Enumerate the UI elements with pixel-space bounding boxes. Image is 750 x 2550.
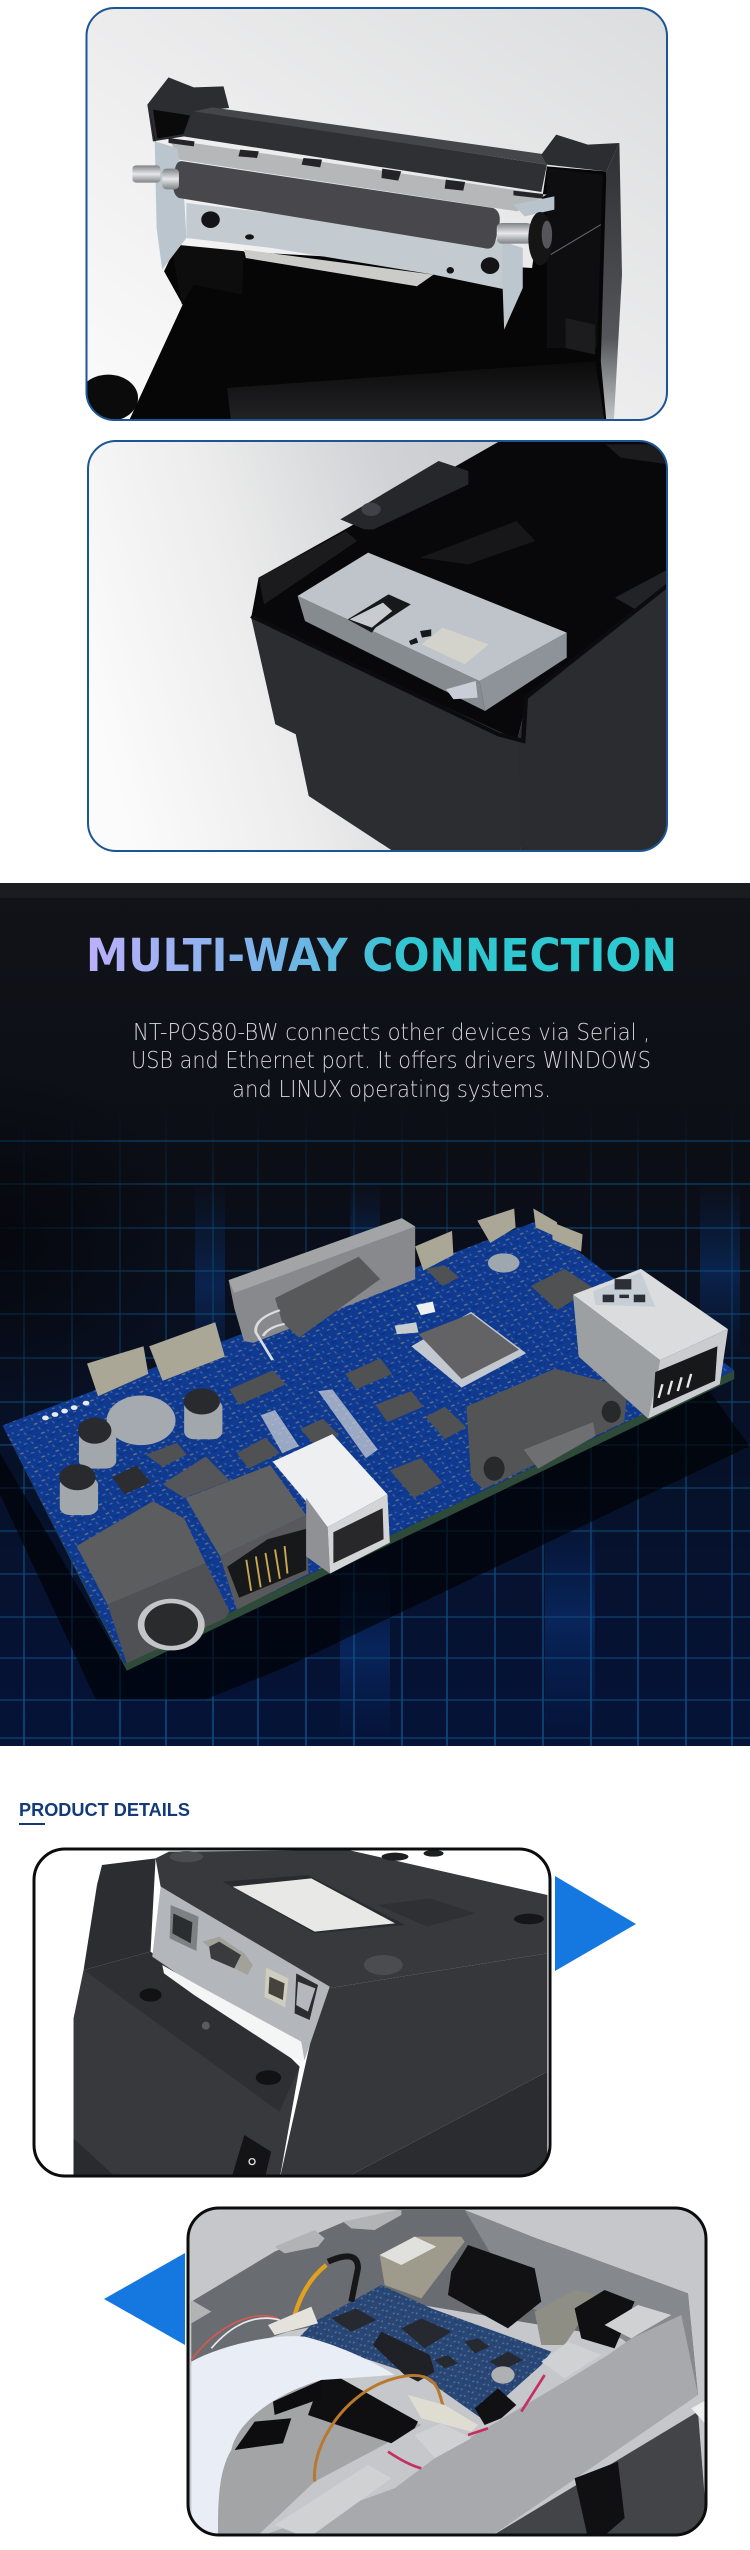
pad circles: [107, 1396, 176, 1445]
left cap: [147, 77, 229, 141]
blue glow columns: [195, 1180, 740, 1740]
interior ledges: [420, 521, 535, 564]
printer interior: [129, 166, 606, 421]
cutter blade: [244, 250, 434, 286]
ribbon wires: [446, 681, 478, 699]
mechanism side: [298, 596, 485, 711]
description text: NT-POS80-BW connects other devices via Serial ,: [133, 1020, 650, 1046]
board plug: [408, 2395, 478, 2432]
floor: [191, 2372, 421, 2538]
pcb: [2, 1221, 734, 1663]
tray floor: [228, 369, 604, 419]
usb b socket: [273, 1434, 387, 1527]
mini din socket: [77, 1501, 206, 1605]
right bracket: [502, 241, 523, 330]
white pads: [416, 1302, 435, 1315]
panel: multi-way connection section: [0, 883, 750, 1746]
striped wires: [295, 2265, 326, 2315]
metal bar: [170, 140, 547, 211]
pink wires: [388, 2375, 545, 2468]
rubber feet: [364, 1955, 403, 1975]
db9 serial socket: [466, 1369, 628, 1489]
ethernet jack: [380, 2237, 465, 2298]
buzzer: [475, 2388, 516, 2425]
panel: open printer roller photo: [79, 8, 667, 421]
main chip: [411, 1312, 526, 1388]
description text: [131, 1020, 651, 1103]
rj11 socket: [186, 1465, 306, 1556]
rear wall: [84, 1858, 156, 1970]
socket jack: [575, 2290, 635, 2348]
arrow: pointing left: [104, 2253, 185, 2345]
printer shell right: [600, 143, 622, 419]
left pillar: [149, 108, 244, 305]
black cutouts: [273, 2380, 321, 2415]
ferrite capacitor: [275, 1257, 380, 1338]
capacitor leads: [256, 1310, 285, 1360]
serial jack: [448, 2245, 541, 2328]
mounting tabs: [191, 2209, 401, 2323]
mechanism top: [298, 553, 567, 681]
arrow: pointing right: [555, 1876, 636, 1971]
top face: [156, 1850, 547, 1988]
white connector: [268, 2307, 318, 2335]
long slot: [308, 2375, 418, 2443]
left bracket: [155, 141, 186, 270]
lower dark side: [488, 2412, 708, 2538]
rim line: [251, 584, 669, 741]
heading: product details: PRODUCT DETAILS: [19, 1800, 190, 1820]
title: MULTI-WAY CONNECTION: [86, 929, 677, 982]
left darkening: [0, 1070, 190, 1410]
rating label: [223, 1875, 405, 1933]
lower crease: [74, 2138, 119, 2180]
serial port: [202, 1937, 253, 1975]
mechanism end: [479, 633, 567, 711]
board chips: [331, 2308, 523, 2370]
qr label: [593, 1272, 655, 1307]
right cap: [541, 135, 619, 171]
lid bar: [183, 111, 547, 192]
panel: internal board photo: [188, 2208, 708, 2538]
right pocket: [547, 168, 603, 348]
rear jack: [163, 1457, 230, 1498]
roller shafts: [132, 165, 160, 183]
board shadow: [0, 1379, 750, 1699]
controller board: [298, 2285, 551, 2418]
small chips: [146, 1265, 593, 1498]
capacitor: [373, 2332, 435, 2382]
screws: [140, 1988, 281, 2085]
wire: [551, 225, 601, 255]
black arch cable: [328, 2256, 358, 2302]
pcb edge: [2, 1370, 734, 1671]
dark background: [0, 883, 750, 1746]
description text: and LINUX operating systems.: [232, 1077, 551, 1103]
panel: rear ports photo: [34, 1849, 550, 2180]
white ledge: [162, 1965, 305, 2062]
ribbon cable: [191, 2336, 395, 2535]
front crease: [84, 1952, 300, 2112]
usb port: [264, 1968, 289, 2008]
chassis wall: [191, 2210, 698, 2395]
orange wires: [314, 2375, 445, 2482]
screws: [201, 211, 499, 274]
description text: USB and Ethernet port. It offers drivers WINDOWS: [131, 1048, 651, 1074]
black knob: [88, 374, 138, 419]
front face: [251, 618, 520, 854]
tact switch: [112, 1465, 151, 1494]
control strip: [340, 461, 468, 529]
printer interior: [251, 441, 669, 743]
roller: [173, 161, 500, 249]
panel: print mechanism photo: [88, 441, 669, 854]
rail tabs: [275, 2305, 671, 2538]
front rail: [255, 2315, 698, 2538]
mechanism slots: [348, 594, 431, 645]
lower front face: [74, 1970, 300, 2180]
right face: [280, 1953, 547, 2180]
header dots: [42, 1401, 89, 1420]
side rim: [259, 531, 357, 604]
electrolytic capacitors: [59, 1388, 222, 1515]
ethernet socket: [573, 1269, 728, 1360]
right side face: [517, 583, 669, 854]
steel plate: [186, 203, 512, 290]
circuit board illustration: [0, 1209, 750, 1699]
strip header: [229, 1218, 415, 1343]
port plate: [152, 1887, 330, 2060]
bar slots: [169, 138, 543, 199]
gear: [528, 212, 547, 265]
beige connectors: [87, 1209, 583, 1396]
power switch: [231, 2135, 271, 2180]
usb jack: [535, 2290, 598, 2345]
rj11 port: [295, 1973, 318, 2020]
ethernet port: [170, 1905, 198, 1951]
top band: [0, 883, 750, 898]
fine pitch connectors: [261, 1410, 299, 1453]
